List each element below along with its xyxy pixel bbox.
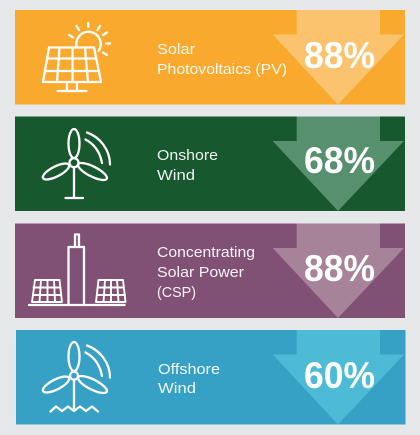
arrow: csp xyxy=(273,224,404,318)
value: 88%: 88% xyxy=(304,35,375,76)
label: solar pv: Solar xyxy=(157,41,195,58)
value: 68%: 68% xyxy=(304,140,375,181)
label: csp: Concentrating xyxy=(157,244,255,261)
label: solar pv: Photovoltaics (PV) xyxy=(157,61,287,78)
arrow: onshore xyxy=(273,116,404,211)
icon: wind turbine xyxy=(41,129,110,198)
label: offshore wind xyxy=(158,361,220,397)
icon: offshore wind turbine xyxy=(41,342,110,412)
panel: solar photovoltaics xyxy=(15,10,405,104)
arrow: offshore xyxy=(273,330,404,424)
label: csp: Solar Power xyxy=(157,264,244,281)
panel: onshore wind xyxy=(15,116,405,211)
label: onshore wind: Onshore xyxy=(157,147,218,164)
panel: concentrating solar power xyxy=(15,224,405,318)
arrow: solar xyxy=(273,10,404,104)
panel: offshore wind xyxy=(16,330,406,424)
label: offshore wind: Wind xyxy=(158,380,196,397)
label: offshore wind: Offshore xyxy=(158,361,220,378)
value: 60%: 60% xyxy=(304,355,375,396)
label: solar pv xyxy=(157,41,287,78)
icon: solar panel and sun xyxy=(43,23,110,91)
value: 88%: 88% xyxy=(304,248,375,289)
label: csp: (CSP) xyxy=(157,284,196,301)
label: onshore wind: Wind xyxy=(157,167,195,184)
label: onshore wind xyxy=(157,147,218,184)
icon: solar tower with panels xyxy=(29,234,126,305)
label: csp xyxy=(157,244,255,301)
